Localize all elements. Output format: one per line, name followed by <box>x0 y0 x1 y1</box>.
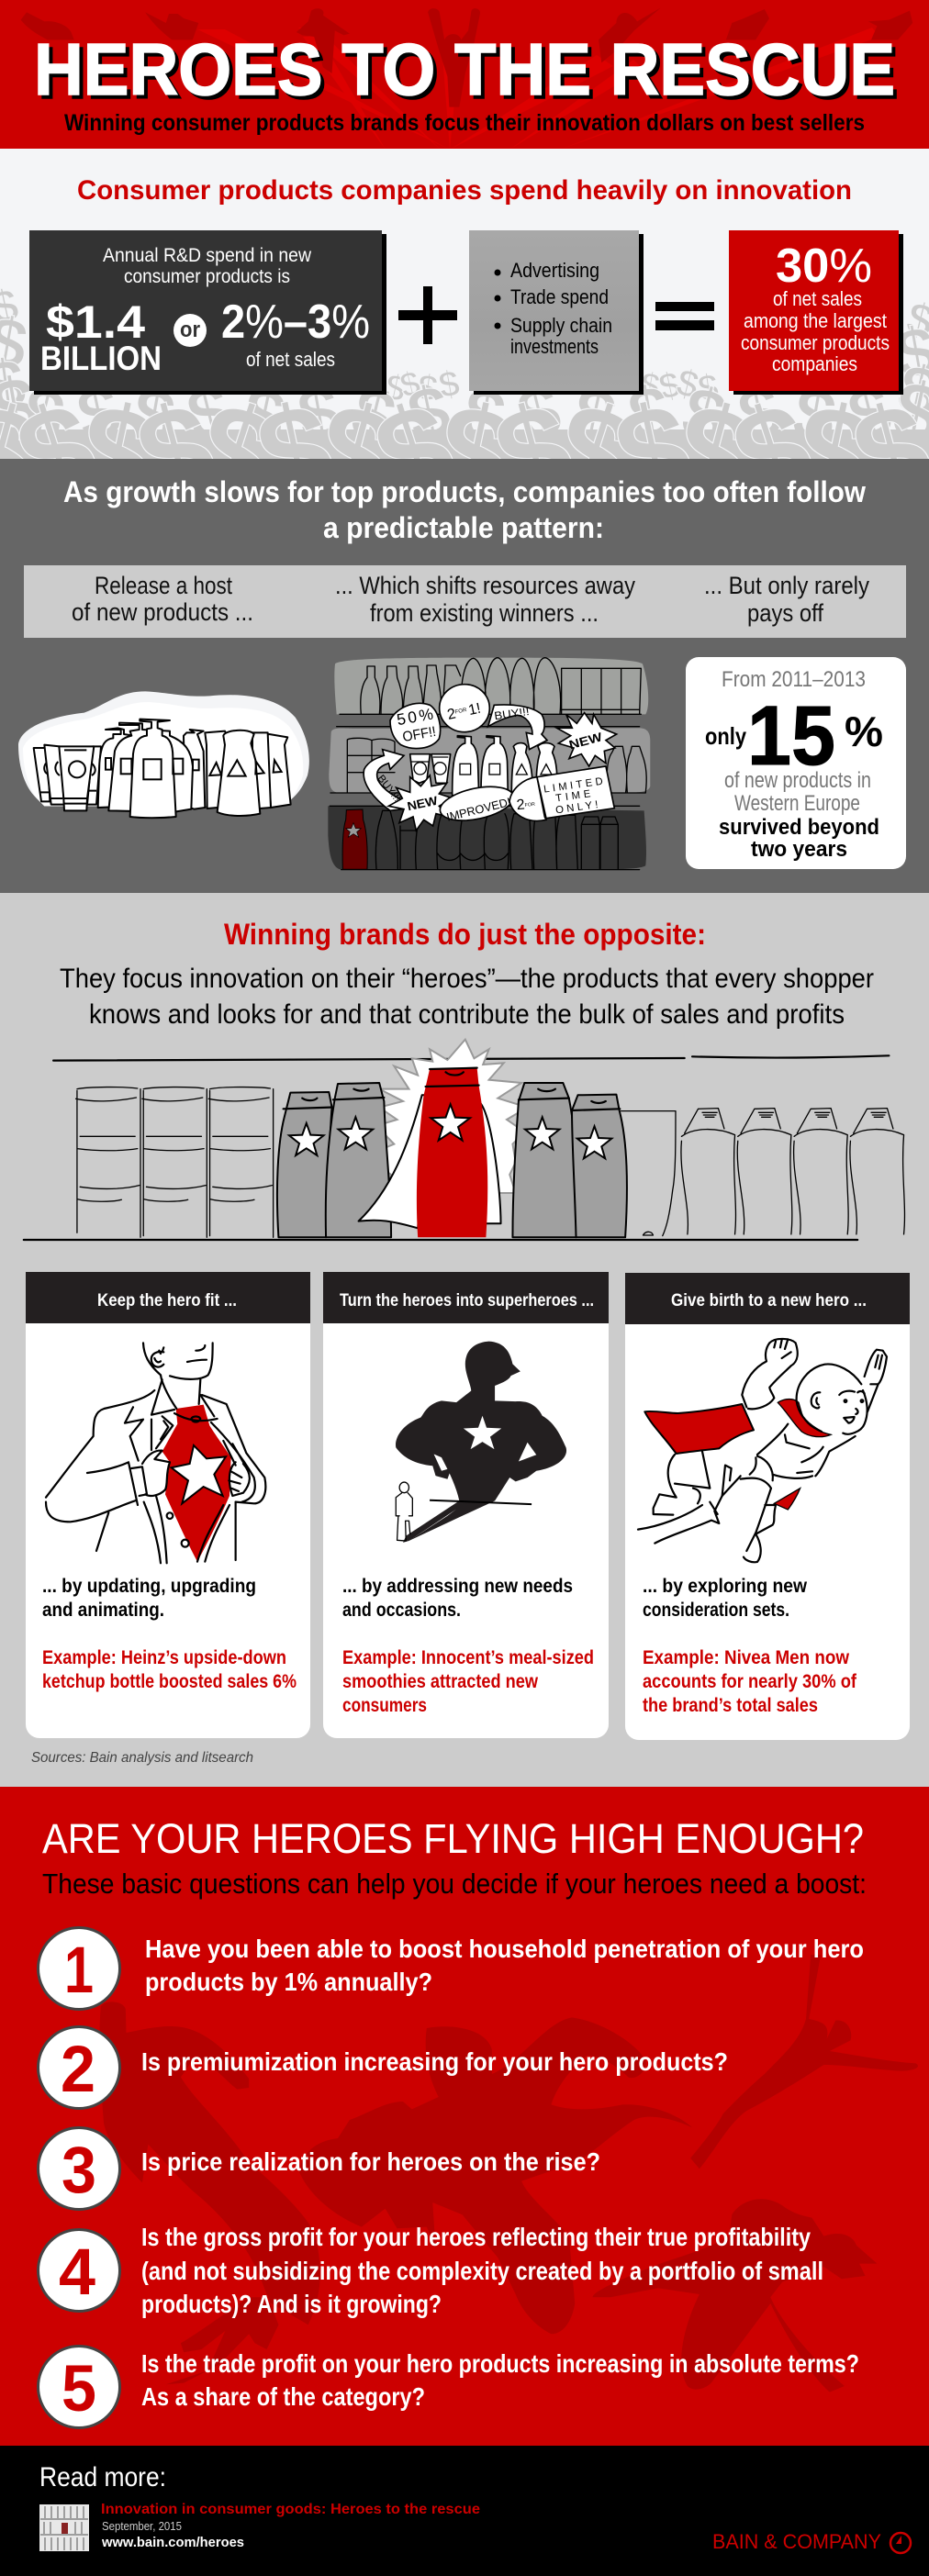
illustration: crowded shelf with promotions <box>328 658 650 870</box>
or badge <box>173 314 207 347</box>
marketing spend box <box>469 230 644 395</box>
callout: 15 percent survive: two years <box>751 837 847 862</box>
pattern steps band <box>24 565 906 638</box>
R&D spend box <box>29 230 386 395</box>
heap of dollar signs background: $ <box>126 371 182 461</box>
heap of dollar signs background: $ <box>358 373 471 531</box>
promo: new burst upper <box>557 713 617 766</box>
pattern steps band: ... Which shifts resources away <box>335 572 635 599</box>
card: turn heroes into superheroes: and occasions. <box>342 1600 461 1621</box>
promo: 50% off: 50% <box>396 705 434 729</box>
promo: new burst lower: NEW <box>406 794 439 813</box>
promo: limited time only: 2 <box>516 797 525 813</box>
question 2 <box>39 2026 728 2109</box>
question 3: Is price realization for heroes on the rise? <box>141 2147 600 2176</box>
R&D spend box: consumer products is <box>124 266 290 287</box>
report title: Innovation in consumer goods: Heroes to the rescue <box>101 2502 480 2517</box>
heap of dollar signs background: $ <box>300 373 410 535</box>
R&D spend box: $1.4 <box>46 296 145 348</box>
question 4: (and not subsidizing the complexity created by a portfolio of small <box>141 2257 823 2285</box>
heap of dollar signs background: $ <box>0 373 113 531</box>
pattern steps band: Release a host <box>95 572 232 599</box>
question 5: As a share of the category? <box>141 2382 425 2411</box>
heap of dollar signs background: $ <box>234 371 293 461</box>
card: turn heroes into superheroes: consumers <box>342 1695 427 1716</box>
card: turn heroes into superheroes <box>323 1272 609 1738</box>
illustration: man opening shirt <box>46 1343 265 1563</box>
card: give birth to a new hero: Example: Nivea Men now <box>643 1647 850 1668</box>
section heading: Consumer products companies spend heavily on innovation <box>77 175 852 206</box>
card: keep the hero fit: Keep the hero fit ... <box>97 1291 237 1310</box>
heap of dollar signs background: $ <box>781 374 885 534</box>
question 1 <box>39 1927 864 2010</box>
section heading: a predictable pattern: <box>323 511 604 544</box>
promo: 2 for 1: 2 <box>446 706 457 723</box>
heap of dollar signs background: $ <box>343 370 404 462</box>
marketing spend box: investments <box>510 335 599 358</box>
heap of dollar signs background: $ <box>179 368 239 458</box>
panel: spending on innovation <box>0 149 929 459</box>
30 percent box: consumer products <box>741 331 890 354</box>
pattern steps band: pays off <box>747 599 823 627</box>
card: turn heroes into superheroes: smoothies attracted new <box>342 1671 539 1692</box>
question 2: 2 <box>61 2034 95 2106</box>
panel: predictable pattern <box>0 459 929 893</box>
heap of dollar signs background: $ <box>415 367 441 409</box>
heap of dollar signs background: $ <box>14 369 73 459</box>
card: keep the hero fit <box>26 1272 310 1738</box>
promo: improved: IMPROVED! <box>445 796 512 824</box>
header sunburst rays <box>197 28 879 150</box>
report date: September, 2015 <box>102 2519 182 2533</box>
heap of dollar signs background: $ <box>672 360 703 407</box>
report link: www.bain.com/heroes <box>101 2535 244 2550</box>
question 4 <box>39 2223 823 2318</box>
marketing spend box: Supply chain <box>510 314 612 337</box>
or badge: or <box>180 318 200 342</box>
heap of dollar signs background: $ <box>177 372 294 536</box>
hero product on shelf <box>342 809 367 869</box>
section heading: Winning brands do just the opposite: <box>224 918 706 951</box>
plain products right <box>621 1109 904 1236</box>
section intro text: knows and looks for and that contribute the bulk of sales and profits <box>89 999 845 1030</box>
heap of dollar signs background <box>0 279 929 536</box>
30 percent box: among the largest <box>744 309 887 332</box>
question 3 <box>39 2127 600 2210</box>
illustration: man with superhero shadow <box>396 1342 566 1543</box>
illustration: new products in spotlight <box>18 691 309 818</box>
header flying hero silhouettes <box>21 7 912 107</box>
question 5 <box>39 2346 859 2428</box>
promo: limited time only <box>509 766 614 820</box>
heap of dollar signs background: $ <box>622 369 677 457</box>
callout: 15 percent survive: only <box>705 722 746 750</box>
card: turn heroes into superheroes: Turn the heroes into superheroes ... <box>340 1291 594 1310</box>
question 1: Have you been able to boost household penetration of your hero <box>145 1935 864 1963</box>
heap of dollar signs background: $ <box>603 374 703 530</box>
promo: buy arrow <box>488 705 547 750</box>
panel: are your heroes flying high enough <box>0 1787 929 2446</box>
heap of dollar signs background: $ <box>716 373 829 531</box>
heap of dollar signs background: $ <box>400 369 457 457</box>
section title: ARE YOUR HEROES FLYING HIGH ENOUGH? <box>42 1815 864 1862</box>
30 percent box: companies <box>772 352 857 375</box>
heap of dollar signs background: $ <box>381 366 409 410</box>
section intro text <box>60 964 874 1030</box>
callout: 15 percent survive: % <box>845 708 883 755</box>
heap of dollar signs background: $ <box>655 364 684 408</box>
promo: 2 for 1: FOR <box>454 708 468 716</box>
heap of dollar signs background: $ <box>423 374 527 534</box>
question 5: 5 <box>62 2353 96 2425</box>
promo: 2 for 1 <box>440 685 489 732</box>
heap of dollar signs background: $ <box>70 369 127 457</box>
heap of dollar signs background: $ <box>481 374 587 530</box>
card text: ... by updating, upgrading <box>42 1576 256 1597</box>
heap of dollar signs background: $ <box>658 373 768 535</box>
card: keep the hero fit: ketchup bottle boosted sales 6% <box>42 1671 297 1692</box>
promo: 50% off: OFF!! <box>401 724 437 745</box>
equals sign <box>655 302 714 330</box>
callout: 15 percent survive: of new products in <box>724 768 871 793</box>
grey starred bottles <box>277 1083 627 1237</box>
section intro: These basic questions can help you decide if your heroes need a boost: <box>42 1868 867 1900</box>
callout: 15 percent survive: 15 <box>747 689 835 783</box>
30 percent box: 30% <box>776 240 872 293</box>
promo: curved buy arrow <box>364 750 409 810</box>
R&D spend box: 2%–3% <box>221 296 370 349</box>
heap of dollar signs background: $ <box>397 364 424 406</box>
panel: footer <box>0 2446 929 2576</box>
panel: winning brands <box>0 893 929 1787</box>
heap of dollar signs background: $ <box>509 368 569 458</box>
R&D spend box: of net sales <box>246 348 335 371</box>
hero cape <box>359 1095 501 1228</box>
question 1: 1 <box>64 1935 94 2007</box>
promo: limited time only: LIMITED <box>543 776 604 796</box>
question 4: products)? And is it growing? <box>141 2290 442 2318</box>
promo: 50% off <box>390 703 441 749</box>
question 1: products by 1% annually? <box>145 1968 432 1996</box>
red hero bottle <box>417 1068 487 1237</box>
callout: 15 percent survive: survived beyond <box>719 815 879 840</box>
heap of dollar signs background: $ <box>731 369 788 457</box>
heap of dollar signs background: $ <box>695 366 722 409</box>
promo: curved buy arrow: BUY!!! <box>375 773 402 804</box>
heap of dollar signs background: $ <box>565 371 623 461</box>
card text: ... by addressing new needs <box>342 1576 573 1597</box>
question 2: Is premiumization increasing for your hero products? <box>141 2047 728 2076</box>
sources note: Sources: Bain analysis and litsearch <box>31 1750 253 1766</box>
heap of dollar signs background: $ <box>674 370 734 462</box>
promo: improved <box>437 781 517 826</box>
read more heading: Read more: <box>39 2462 166 2492</box>
card: keep the hero fit: Example: Heinz’s upside-down <box>42 1647 286 1668</box>
promo: new burst lower <box>388 775 453 831</box>
30 percent box <box>729 230 903 395</box>
promo: limited time only: TIME <box>555 788 592 804</box>
heap of dollar signs background: $ <box>436 363 463 407</box>
question 4: Is the gross profit for your heroes reflecting their true profitability <box>141 2223 811 2251</box>
card text: ... by exploring new <box>643 1576 808 1597</box>
card: give birth to a new hero: accounts for nearly 30% of <box>643 1671 857 1692</box>
promo: 2 for 1: 1! <box>467 701 482 719</box>
callout: 15 percent survive: From 2011–2013 <box>722 667 866 692</box>
report thumbnail <box>39 2504 89 2551</box>
card: turn heroes into superheroes: Example: Innocent’s meal-sized <box>342 1647 594 1668</box>
question 3: 3 <box>62 2135 96 2207</box>
card: give birth to a new hero: the brand’s total sales <box>643 1695 818 1716</box>
plus sign <box>398 286 457 344</box>
promo: new burst upper: NEW <box>567 730 604 752</box>
pattern steps band: from existing winners ... <box>370 599 599 627</box>
heap of dollar signs background: $ <box>637 365 663 407</box>
Bain & Company logo: BAIN & COMPANY <box>712 2530 881 2553</box>
heap of dollar signs background: $ <box>245 374 345 530</box>
heap of dollar signs background: $ <box>456 371 512 461</box>
heap of dollar signs background: $ <box>123 374 229 530</box>
promo: buy arrow: BUY!!! <box>494 705 530 722</box>
heap of dollar signs background: $ <box>787 371 843 461</box>
shelf lines <box>24 1055 889 1240</box>
illustration: flying baby hero <box>638 1339 887 1562</box>
glow burst <box>364 1040 528 1193</box>
card: keep the hero fit: and animating. <box>42 1600 164 1621</box>
marketing spend box: Trade spend <box>510 285 609 308</box>
card: give birth to a new hero: Give birth to a new hero ... <box>671 1291 867 1310</box>
30 percent box: of net sales <box>773 287 862 310</box>
marketing spend box: Advertising <box>510 259 599 282</box>
callout: 15 percent survive <box>686 657 906 869</box>
section heading: As growth slows for top products, companies too often follow <box>63 475 866 508</box>
R&D spend box: BILLION <box>40 340 162 377</box>
panel: header <box>0 0 929 150</box>
pattern steps band: ... But only rarely <box>704 572 869 599</box>
flying hero silhouettes background <box>99 1955 918 2392</box>
R&D spend box: Annual R&D spend in new <box>103 245 312 266</box>
illustration: hero product on shelf <box>24 1040 904 1240</box>
heap of dollar signs background: $ <box>535 372 652 536</box>
promo: limited time only: ONLY! <box>554 799 599 816</box>
pattern steps band: of new products ... <box>72 598 253 626</box>
callout: 15 percent survive: Western Europe <box>734 791 860 816</box>
stacked jars <box>76 1087 274 1237</box>
question 4: 4 <box>59 2236 96 2309</box>
heap of dollar signs background: $ <box>65 374 169 534</box>
promo: limited time only: FOR <box>524 802 535 808</box>
heap of dollar signs background: $ <box>840 368 900 458</box>
heap of dollar signs background: $ <box>292 369 346 457</box>
section heading <box>63 475 866 544</box>
card: give birth to a new hero <box>625 1273 910 1740</box>
card: give birth to a new hero: consideration sets. <box>643 1600 789 1621</box>
subtitle: Winning consumer products brands focus their innovation dollars on best sellers <box>64 110 865 136</box>
section intro text: They focus innovation on their “heroes”—the products that every shopper <box>60 964 874 994</box>
